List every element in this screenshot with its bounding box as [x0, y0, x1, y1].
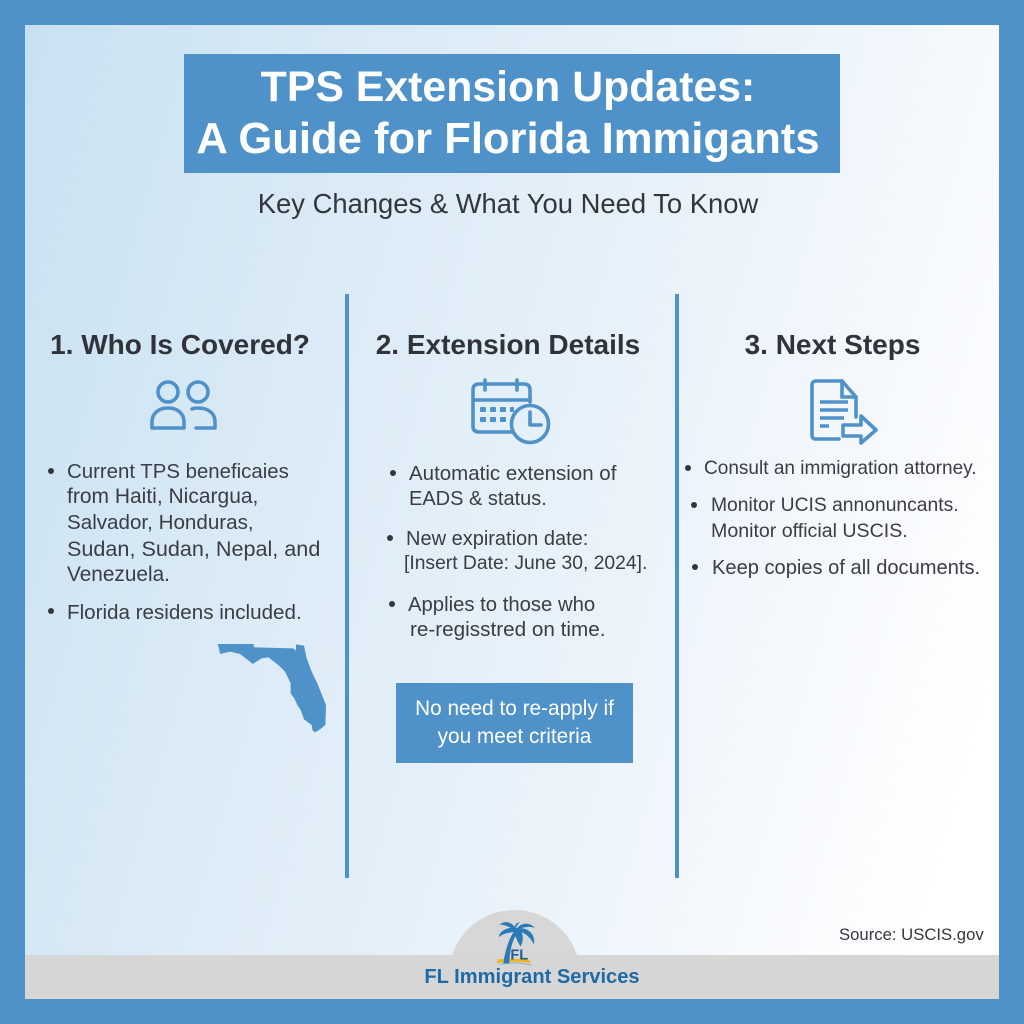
bullet list: EADS & status.	[409, 488, 547, 510]
bullet list: Monitor official USCIS.	[711, 520, 908, 542]
source note: Source: USCIS.gov	[839, 925, 984, 944]
bullet list: Keep copies of all documents.	[712, 557, 980, 579]
footer band with logo	[25, 910, 999, 999]
logo wordmark: FL Immigrant Services	[424, 966, 640, 988]
bullet list: Venezuela.	[67, 563, 170, 586]
bullet list: Salvador, Honduras,	[67, 511, 254, 534]
title banner: TPS Extension Updates:	[261, 63, 755, 111]
callout: No need to re-apply if	[415, 697, 614, 720]
bullet list: Consult an immigration attorney.	[704, 458, 977, 479]
icon: calendar and clock	[471, 378, 550, 444]
heading: 1. Who Is Covered?	[50, 329, 310, 360]
footer bar	[25, 955, 999, 999]
bullet list: Automatic extension of	[409, 462, 616, 485]
panel: extension details	[376, 329, 647, 763]
bullet list: from Haiti, Nicargua,	[67, 485, 258, 508]
bullet list: re-regisstred on time.	[410, 618, 605, 641]
callout: you meet criteria	[438, 725, 591, 748]
title banner	[184, 54, 840, 173]
bullet list: Sudan, Sudan, Nepal, and	[67, 536, 320, 561]
panel: next steps	[685, 329, 980, 579]
bullet list: [Insert Date: June 30, 2024].	[404, 553, 647, 574]
bullet list	[685, 458, 980, 579]
icon: document with arrow	[810, 379, 878, 445]
panel: who is covered	[48, 329, 326, 732]
subtitle: Key Changes & What You Need To Know	[258, 188, 758, 219]
footer arch	[452, 910, 577, 955]
title banner: A Guide for Florida Immigants	[196, 115, 820, 163]
icon: people	[150, 380, 217, 430]
bullet list	[387, 462, 647, 641]
bullet list: Current TPS beneficaies	[67, 461, 289, 483]
divider: right	[675, 294, 679, 878]
bullet list	[48, 461, 320, 624]
icon: palm tree logo	[496, 922, 535, 966]
callout	[396, 683, 633, 763]
bullet list: Monitor UCIS annonuncants.	[711, 495, 959, 516]
divider: left	[345, 294, 349, 878]
heading: 3. Next Steps	[745, 329, 920, 360]
icon: Florida map	[218, 644, 326, 732]
icon: palm tree logo: FL	[510, 947, 528, 963]
bullet list: Applies to those who	[408, 594, 595, 616]
heading: 2. Extension Details	[376, 329, 640, 360]
bullet list: Florida residens included.	[67, 601, 302, 624]
bullet list: New expiration date:	[406, 528, 588, 550]
